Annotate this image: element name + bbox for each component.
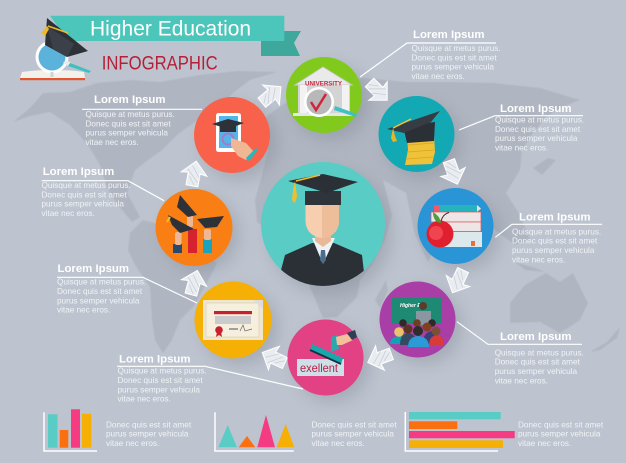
panel: classroom icon [380, 282, 456, 358]
arrow: to class [441, 265, 475, 298]
callout: assessment: Donec quis est sit amet [118, 376, 203, 385]
heading: Higher Education: Higher Education [90, 18, 251, 41]
callout: assessment [117, 354, 303, 404]
triangle chart [215, 412, 294, 451]
panel: university icon [286, 57, 362, 133]
callout: books: Lorem Ipsum [519, 212, 591, 224]
arrow: to university [253, 77, 289, 113]
text: horizontal chart caption: vitae nec eros. [518, 439, 571, 448]
callout: classroom: purus semper vehicula [495, 367, 578, 376]
callout: graduation cost: Donec quis est sit amet [495, 125, 581, 134]
text: triangle chart caption: Donec quis est sit amet [312, 420, 397, 429]
callout: tablet [82, 94, 202, 147]
world map [13, 71, 620, 353]
bar chart [44, 409, 97, 451]
callout: tablet: Quisque at metus purus. [86, 110, 175, 119]
panel: certificate icon [194, 282, 272, 358]
callout: university: Donec quis est sit amet [412, 53, 497, 62]
callout: certificate: Lorem Ipsum [58, 263, 129, 275]
callout: raised hands: Quisque at metus purus. [42, 181, 131, 190]
subtitle: INFOGRAPHIC [102, 53, 218, 74]
circle shadows [163, 64, 500, 402]
callout: assessment: purus semper vehicula [118, 385, 200, 394]
callout: books: vitae nec eros. [512, 255, 565, 264]
text: horizontal chart caption: Donec quis est sit amet [518, 420, 603, 429]
callout: books: purus semper vehicula [512, 246, 595, 255]
arrow: to hands [178, 267, 210, 298]
callout: graduation cost [459, 103, 584, 152]
text: bar chart caption: Donec quis est sit amet [106, 420, 191, 429]
callout: university: purus semper vehicula [412, 63, 494, 72]
panel: university icon: UNIVERSITY [305, 80, 343, 88]
callout: tablet: Donec quis est sit amet [86, 119, 171, 128]
callout: raised hands: vitae nec eros. [42, 209, 95, 218]
callout: tablet: purus semper vehicula [86, 129, 168, 138]
arrow: to tablet [179, 159, 209, 188]
callout: classroom: Quisque at metus purus. [495, 348, 584, 357]
callout: graduation cost: purus semper vehicula [495, 134, 578, 143]
callout: books: Donec quis est sit amet [512, 237, 598, 246]
callout: tablet: vitae nec eros. [86, 138, 139, 147]
callout: university: Quisque at metus purus. [412, 44, 501, 53]
callout: books [495, 212, 602, 264]
text: bar chart caption: vitae nec eros. [106, 439, 159, 448]
callout: graduation cost: vitae nec eros. [495, 143, 548, 152]
text: triangle chart caption: purus semper vehicula [312, 430, 394, 439]
callout: classroom: vitae nec eros. [495, 376, 548, 385]
callout: university: Lorem Ipsum [413, 29, 485, 41]
callout: university: vitae nec eros. [412, 72, 465, 81]
arrow: to graduate cost [360, 73, 396, 109]
callout: graduation cost: Quisque at metus purus. [495, 116, 584, 124]
panel: books and apple icon [418, 188, 494, 264]
panel: assessment stamp icon: exellent [300, 361, 339, 375]
callout: assessment: Lorem Ipsum [119, 354, 191, 366]
panel: classroom icon: Higher Edu [400, 303, 427, 309]
callout: certificate: vitae nec eros. [57, 306, 110, 315]
callout: certificate: purus semper vehicula [57, 296, 140, 305]
arrow: to assessment [363, 342, 396, 375]
callout: tablet: Lorem Ipsum [94, 94, 166, 106]
text: triangle chart caption: vitae nec eros. [312, 439, 365, 448]
callout: raised hands: purus semper vehicula [42, 200, 124, 209]
callout: classroom: Lorem Ipsum [500, 331, 572, 343]
callout: certificate: Donec quis est sit amet [57, 287, 143, 296]
text: bar chart caption: purus semper vehicula [106, 430, 189, 439]
arrow: to books [437, 156, 470, 189]
horizontal bar chart [405, 412, 515, 451]
title ribbon [50, 16, 301, 56]
icon: globe, book and cap [20, 18, 91, 80]
callout: assessment: Quisque at metus purus. [118, 367, 207, 376]
callout: raised hands [42, 166, 164, 218]
callout: raised hands: Donec quis est sit amet [42, 190, 127, 199]
callout: graduation cost: Lorem Ipsum [500, 103, 572, 115]
panel: raised hands icon [156, 189, 232, 266]
callout: raised hands: Lorem Ipsum [43, 166, 114, 178]
callout: classroom: Donec quis est sit amet [495, 358, 581, 367]
panel: assessment stamp icon [288, 320, 364, 396]
panel: tablet icon [194, 97, 270, 173]
callout: classroom [457, 322, 584, 385]
callout: books: Quisque at metus purus. [512, 227, 601, 236]
arrow: to certificate [257, 341, 290, 375]
callout: university [360, 29, 501, 81]
panel: graduation cost icon [378, 96, 454, 172]
panel: graduate portrait [261, 162, 385, 290]
callout: certificate: Quisque at metus purus. [57, 278, 146, 287]
callout: certificate [57, 263, 197, 315]
text: horizontal chart caption: purus semper vehicula [518, 430, 601, 439]
callout: assessment: vitae nec eros. [118, 395, 171, 404]
